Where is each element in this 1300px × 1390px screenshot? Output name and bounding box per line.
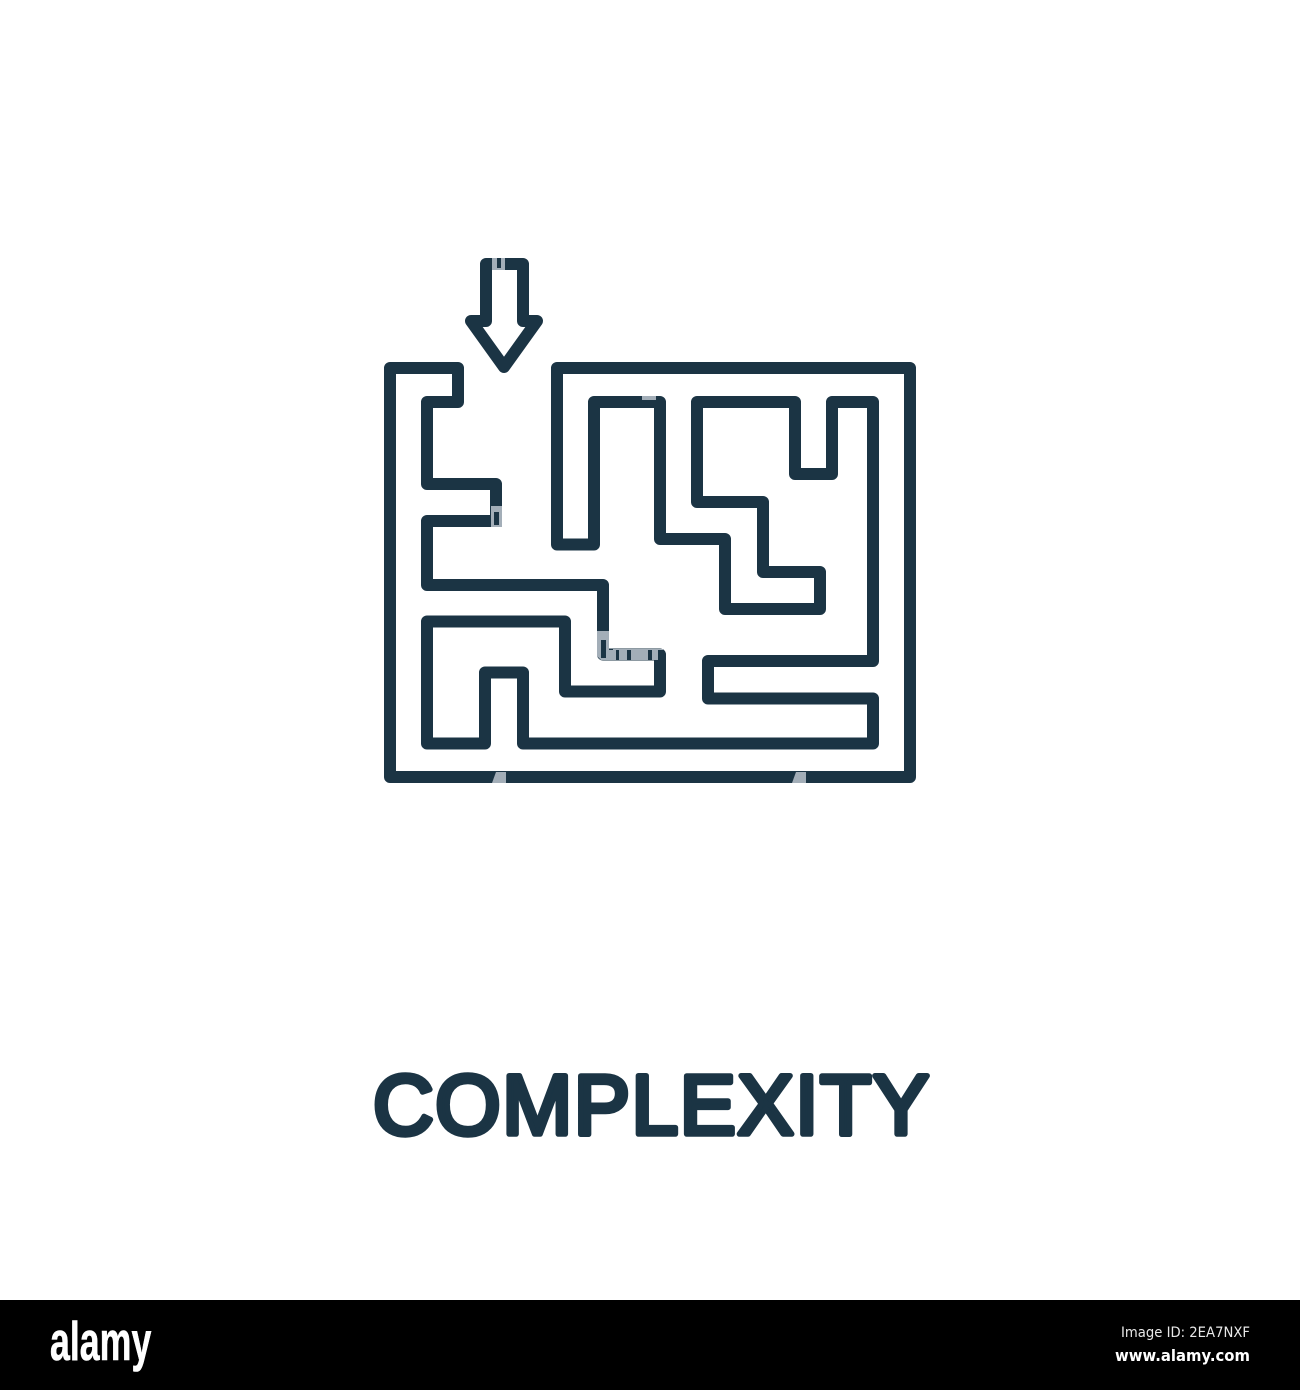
icon: down arrow [471, 264, 537, 367]
title: COMPLEXITY [373, 1058, 929, 1152]
watermark fragments on the icon [491, 258, 806, 783]
footer image id: Image ID: 2EA7NXF [1121, 1325, 1250, 1341]
icon: maze with entry arrow [390, 264, 910, 777]
icon: maze walls [390, 368, 910, 777]
footer bar [0, 1300, 1300, 1390]
footer website: www.alamy.com [1115, 1346, 1250, 1365]
footer logo: alamy [50, 1310, 152, 1372]
